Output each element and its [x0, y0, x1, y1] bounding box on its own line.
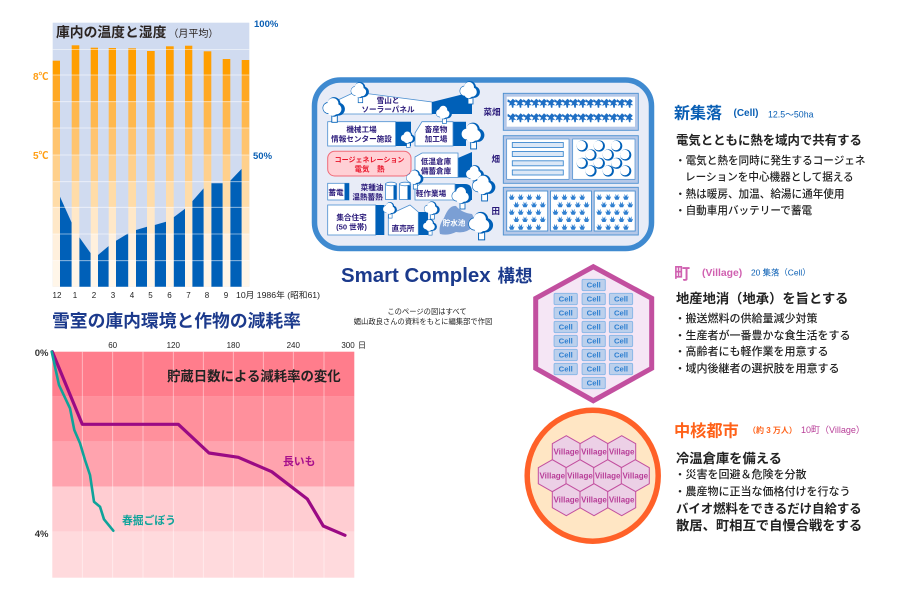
rapeseed oil heat storage label: 温熱蓄熱 [352, 192, 383, 202]
vegetable field [503, 93, 638, 130]
building: machine factory: 情報センター施設 [331, 134, 392, 144]
day axis labels: 240 [287, 341, 301, 350]
bullet list: ・生産者が一番豊かな食生活をする [674, 328, 850, 342]
chart title: 庫内の温度と湿度（月平均） [56, 24, 218, 40]
village labels: Village [609, 448, 635, 456]
bullet list: ・域内後継者の選択肢を用意する [674, 361, 840, 375]
temperature axis labels [33, 72, 49, 162]
cell labels: Cell [587, 281, 601, 290]
bullet list: レーションを中心機器として据える [685, 170, 854, 184]
village labels: Village [595, 472, 621, 480]
rice paddies [503, 187, 638, 235]
day axis labels: 300 [341, 341, 355, 350]
oil tanks [386, 182, 410, 200]
reservoir: 貯水池 [443, 218, 466, 228]
cell boxes [554, 279, 633, 389]
month labels: 10月 1986年 (昭和61) [236, 289, 320, 300]
village labels: Village [553, 448, 580, 456]
month labels: 12 [53, 291, 62, 300]
outer frame [314, 80, 652, 248]
day axis labels [108, 341, 366, 350]
chart: crop loss rate by storage days [35, 341, 366, 578]
building: snow mountain and solar panels: 雪山と [377, 96, 399, 105]
trees [323, 82, 495, 240]
day axis labels: 日 [358, 341, 366, 350]
humidity axis labels [253, 19, 279, 162]
field labels: 菜畑 [483, 107, 501, 117]
scale note: 12.5～50ha [768, 110, 814, 120]
field labels [483, 107, 501, 216]
month labels: 6 [167, 291, 172, 300]
building: livestock processing [415, 122, 466, 146]
line: nagaimo [52, 352, 345, 535]
temperature orange bars [53, 45, 249, 287]
month labels: 7 [186, 291, 191, 300]
cogeneration box: 電気 熱 [354, 164, 385, 174]
label: nagaimo: 長いも [283, 455, 315, 468]
building: light work area: 軽作業場 [416, 188, 447, 198]
text block: core city [674, 422, 865, 533]
panel: smart complex diagram [314, 80, 652, 248]
cogeneration box: コージェネレーション [335, 156, 404, 164]
title: smart complex: Smart Complex 構想 [341, 265, 533, 287]
bullet list: ・農産物に正当な価格付けを行なう [674, 484, 850, 498]
temperature axis labels: 5℃ [33, 151, 49, 162]
cell labels: Cell [614, 351, 628, 360]
building: machine factory [328, 122, 411, 146]
bullet list: ・電気と熱を同時に発生するコージェネ [675, 154, 865, 167]
upland field [503, 136, 638, 183]
cell labels: Cell [587, 309, 601, 318]
day axis labels: 120 [167, 341, 181, 350]
humidity axis labels: 50% [253, 151, 273, 162]
cell labels: Cell [614, 337, 628, 346]
cell labels: Cell [614, 323, 628, 332]
cell labels: Cell [587, 323, 601, 332]
scale note [702, 268, 811, 279]
text block: new settlement [674, 104, 865, 217]
hexagon outline [536, 267, 652, 401]
building: cold warehouse: 備蓄倉庫 [421, 166, 452, 176]
heading: core city: 中核都市 [674, 422, 739, 440]
building: apartments: 集合住宅 [336, 212, 367, 222]
scale note: 20 集落（Cell） [751, 268, 811, 278]
cell labels: Cell [559, 337, 573, 346]
month labels: 3 [111, 291, 116, 300]
building: livestock processing: 加工場 [425, 134, 448, 144]
closing lines: 散居、町相互で自慢合戦をする [676, 517, 862, 533]
village labels: Village [567, 472, 593, 480]
cell labels: Cell [614, 309, 628, 318]
building: machine factory: 機械工場 [346, 124, 377, 134]
cell labels: Cell [587, 337, 601, 346]
scale note: 10町（Village） [801, 425, 865, 435]
month labels: 8 [205, 291, 210, 300]
humidity blue area [60, 169, 242, 287]
cell labels: Cell [614, 295, 628, 304]
village labels: Village [553, 496, 580, 504]
building: direct sales [388, 205, 428, 235]
building: direct sales: 直売所 [392, 223, 415, 233]
heading: new settlement: 新集落 [674, 104, 722, 122]
lead line: 電気とともに熱を域内で共有する [676, 132, 862, 148]
lead line: 地産地消（地承）を旨とする [676, 290, 848, 306]
pink bands [52, 352, 354, 578]
village labels: Village [539, 472, 566, 480]
label: spring burdock: 春掘ごぼう [122, 513, 176, 527]
percent axis labels [35, 348, 49, 540]
bullet list: ・搬送燃料の供給量減少対策 [674, 311, 818, 325]
chart subtitle: 貯蔵日数による減耗率の変化 [167, 368, 341, 384]
day axis labels: 180 [227, 341, 241, 350]
building: apartments [328, 205, 384, 235]
closing lines: バイオ燃料をできるだけ自給する [676, 501, 862, 516]
heading: storage environment and crop loss: 雪室の庫内環境と作物の減耗率 [52, 310, 301, 331]
month labels: 4 [130, 291, 135, 300]
text block: village [674, 266, 850, 375]
building: light work area [415, 184, 472, 200]
month labels: 5 [148, 291, 153, 300]
lead line: 冷温倉庫を備える [676, 450, 782, 466]
cogeneration box [328, 151, 411, 176]
heading: village: 町 [674, 266, 690, 283]
humidity axis labels: 100% [254, 19, 279, 30]
cell labels: Cell [559, 295, 573, 304]
cell labels: Cell [559, 323, 573, 332]
source note [354, 307, 492, 326]
month labels: 2 [92, 291, 97, 300]
percent axis labels: 0% [35, 348, 49, 359]
bullet list: ・災害を回避＆危険を分散 [674, 467, 806, 481]
cell labels: Cell [587, 379, 601, 388]
building: cold warehouse: 低温倉庫 [421, 156, 452, 166]
diagram: core city circle of villages [527, 410, 658, 541]
cell labels: Cell [587, 365, 601, 374]
building: battery storage [328, 183, 349, 200]
bullet list: ・自動車用バッテリーで蓄電 [675, 204, 812, 217]
temperature axis labels: 8℃ [33, 72, 49, 83]
rapeseed oil heat storage label [352, 182, 384, 202]
village hexagons [538, 436, 649, 516]
building: battery storage: 蓄電 [328, 187, 344, 197]
cell labels: Cell [559, 309, 573, 318]
scale note: (Cell) [734, 108, 758, 119]
village labels: Village [581, 496, 607, 504]
source note: 媚山政良さんの資料をもとに編集部で作図 [354, 317, 492, 326]
source note: このページの図はすべて [387, 307, 467, 316]
rapeseed oil heat storage label: 菜種油 [361, 182, 384, 192]
circle outline [527, 410, 658, 541]
cell labels: Cell [587, 295, 601, 304]
scale note: （約 3 万人） [748, 425, 797, 435]
scale note [748, 425, 865, 435]
cell labels: Cell [587, 351, 601, 360]
village labels [539, 448, 649, 504]
day axis labels: 60 [108, 341, 118, 350]
village labels: Village [581, 448, 607, 456]
line: spring burdock [52, 352, 113, 531]
bullet list [674, 467, 850, 498]
building: apartments: (50 世帯) [336, 222, 367, 232]
scale note: (Village) [702, 268, 742, 279]
cell labels: Cell [559, 351, 573, 360]
building: snow mountain and solar panels [338, 92, 472, 114]
closing lines [676, 501, 862, 533]
bullet list [675, 154, 865, 217]
building: snow mountain and solar panels: ソーラーパネル [361, 104, 415, 114]
village labels: Village [622, 472, 649, 480]
month labels: 9 [224, 291, 229, 300]
building: livestock processing: 畜産物 [425, 124, 448, 134]
percent axis labels: 4% [35, 529, 49, 540]
bullet list: ・高齢者にも軽作業を用意する [674, 344, 828, 358]
cell labels [559, 281, 628, 388]
month labels [53, 289, 320, 300]
chart: temperature and humidity in storage [33, 19, 320, 300]
scale note [734, 108, 814, 120]
bullet list [674, 311, 850, 375]
bullet list: ・熱は暖房、加温、給湯に通年使用 [675, 188, 844, 200]
field labels: 田 [491, 206, 500, 216]
cell labels: Cell [559, 365, 573, 374]
diagram: village hexagon of cells [536, 267, 652, 401]
chart background [53, 23, 249, 287]
month labels: 1 [73, 291, 78, 300]
village labels: Village [609, 496, 635, 504]
building: cold warehouse [415, 152, 472, 178]
field labels: 畑 [491, 154, 500, 164]
reservoir [440, 206, 475, 235]
cell labels: Cell [614, 365, 628, 374]
